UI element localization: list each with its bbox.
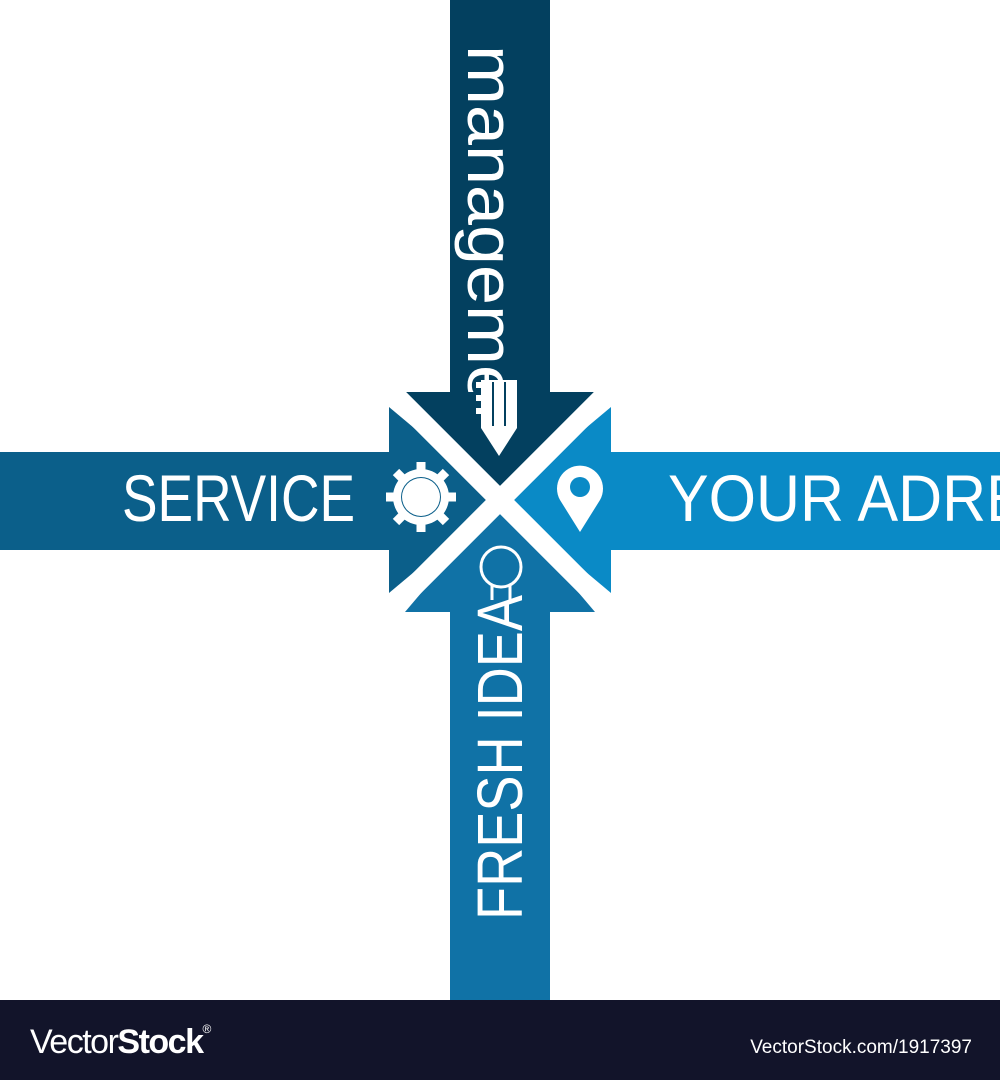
icon: gear	[386, 462, 456, 532]
arrow: left (service)	[0, 407, 500, 593]
white X separator	[380, 380, 620, 620]
footer bar	[0, 1000, 1000, 1080]
icon: pencil	[476, 380, 517, 456]
icon: light bulb	[481, 547, 521, 600]
text: FRESH IDEA: FRESH IDEA	[464, 595, 536, 920]
icon: location pin	[557, 466, 603, 532]
text: management: management	[454, 45, 528, 465]
arrow: top (management)	[405, 0, 595, 500]
text: SERVICE: SERVICE	[122, 461, 355, 535]
arrow: bottom (fresh idea)	[405, 500, 595, 1000]
footer: logo: VectorStock	[30, 1023, 202, 1061]
footer: logo: ®	[202, 1022, 211, 1036]
arrow: right (your adress)	[500, 407, 1000, 593]
footer: url: VectorStock.com/1917397	[750, 1037, 972, 1058]
